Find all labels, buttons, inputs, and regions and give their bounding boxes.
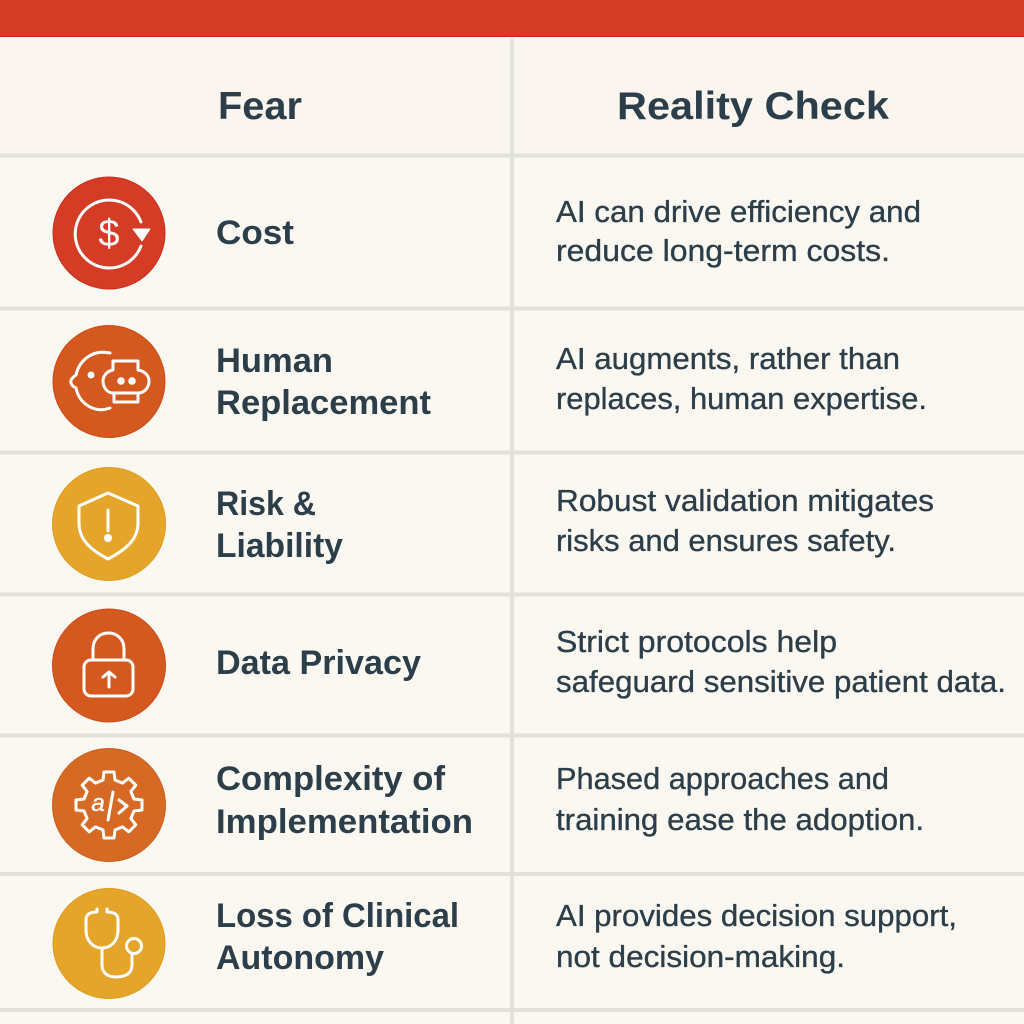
reality text: Complexity of Implementation (556, 761, 924, 837)
reality text: Data Privacy: safeguard sensitive patient data. (556, 664, 1006, 699)
reality text: Loss of Clinical Autonomy (556, 898, 957, 974)
fear label: Human Replacement: Human (216, 342, 333, 380)
icon: human and robot (53, 326, 165, 438)
fear label: Complexity of Implementation (216, 760, 473, 841)
reality text: Human Replacement: replaces, human expertise. (556, 381, 927, 416)
top banner (0, 0, 1024, 37)
icon: dollar cycle: $ (98, 213, 120, 255)
reality text: Loss of Clinical Autonomy: AI provides decision support, (556, 898, 957, 933)
reality text: Data Privacy: Strict protocols help (556, 624, 837, 659)
row: Cost (53, 177, 921, 289)
fear label: Complexity of Implementation: Implementation (216, 803, 473, 841)
reality text: Risk & Liability: Robust validation mitigates (556, 483, 934, 518)
reality text: Cost (556, 194, 921, 268)
heading: Reality Check: Reality Check (617, 85, 889, 128)
fear label: Complexity of Implementation: Complexity of (216, 760, 446, 798)
reality text: Complexity of Implementation: training ease the adoption. (556, 802, 924, 837)
reality text: Human Replacement (556, 341, 927, 416)
reality text: Risk & Liability (556, 483, 934, 558)
fear label: Loss of Clinical Autonomy: Autonomy (216, 939, 384, 977)
icon: stethoscope (53, 888, 165, 998)
icon: shield alert (52, 468, 166, 580)
fear label: Human Replacement (216, 342, 431, 422)
reality text: Cost: reduce long-term costs. (556, 233, 890, 268)
fear label: Cost: Cost (216, 214, 294, 252)
fear label: Risk & Liability: Risk & (216, 485, 316, 523)
reality text: Data Privacy (556, 624, 1006, 699)
fear label: Loss of Clinical Autonomy (216, 897, 459, 977)
row: Data Privacy (52, 609, 1006, 722)
icon: code gear: a (91, 790, 105, 817)
row: Loss of Clinical Autonomy (53, 888, 957, 998)
reality text: Human Replacement: AI augments, rather than (556, 341, 900, 376)
icon: padlock (52, 609, 166, 722)
fear label: Loss of Clinical Autonomy: Loss of Clinical (216, 897, 459, 935)
icon: code gear (52, 748, 166, 862)
row: Human Replacement (53, 326, 927, 438)
heading: Fear: Fear (218, 85, 302, 128)
row: Complexity of Implementation (52, 748, 924, 862)
fear label: Risk & Liability (216, 485, 343, 565)
fear label: Data Privacy: Data Privacy (216, 644, 421, 682)
reality text: Cost: AI can drive efficiency and (556, 194, 921, 229)
reality text: Risk & Liability: risks and ensures safety. (556, 523, 896, 558)
row: Risk & Liability (52, 468, 934, 580)
icon: dollar cycle (53, 177, 165, 289)
reality text: Loss of Clinical Autonomy: not decision-making. (556, 939, 845, 974)
fear label: Risk & Liability: Liability (216, 527, 343, 565)
fear label: Human Replacement: Replacement (216, 384, 431, 422)
reality text: Complexity of Implementation: Phased approaches and (556, 761, 889, 796)
